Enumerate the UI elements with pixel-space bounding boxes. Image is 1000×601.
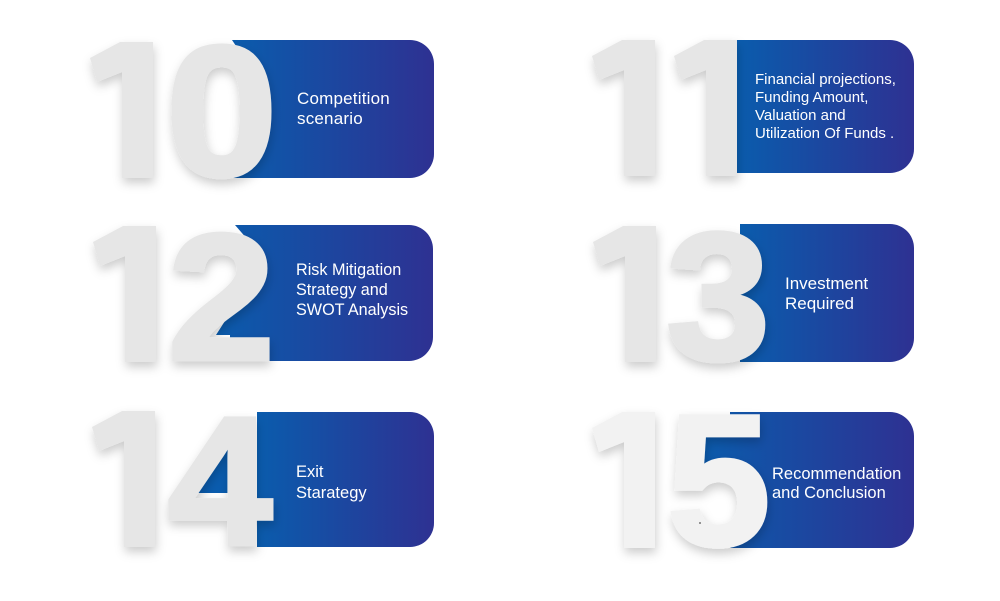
panel: item 15: [590, 412, 914, 558]
panel: item 13: [591, 224, 914, 373]
label 14: Starategy: [296, 484, 367, 502]
panel: item 12: [91, 225, 433, 372]
label 12: SWOT Analysis: [296, 301, 408, 319]
label 13: Investment: [785, 274, 868, 293]
card 15: [698, 412, 914, 548]
card 12: [216, 225, 433, 361]
number 13: 1: [580, 184, 690, 404]
label 14: Exit: [296, 463, 324, 481]
card 14: [257, 412, 434, 547]
number 13: [591, 226, 770, 373]
panel: item 10: [88, 40, 434, 189]
number 15: [590, 412, 771, 558]
number 14: [90, 411, 278, 556]
number 15: 1: [579, 370, 689, 590]
label 13: Required: [785, 294, 854, 313]
number 14: 4: [167, 379, 273, 584]
panel: item 11: [590, 40, 914, 186]
panel: item 14: [90, 411, 434, 556]
number 11: [590, 40, 742, 186]
card 11: [737, 40, 914, 173]
label 10: scenario: [297, 109, 363, 128]
label 15: Recommendation: [772, 465, 901, 483]
label 11: Utilization Of Funds .: [755, 125, 894, 142]
number 13: 3: [666, 196, 770, 399]
card 13: [740, 224, 914, 362]
number 10: [88, 42, 276, 189]
label 12: Risk Mitigation: [296, 261, 401, 279]
label 11: Valuation and: [755, 107, 846, 124]
label 12: Strategy and: [296, 281, 388, 299]
number 10: 1: [77, 0, 187, 220]
number 12: 1: [80, 184, 190, 404]
label 11: Financial projections,: [755, 71, 896, 88]
number 11: 1: [661, 0, 771, 218]
counter of the 4 showing the card colour: [192, 430, 230, 493]
speck on the 5: [699, 522, 701, 524]
number 11: 1: [579, 0, 689, 218]
label 10: Competition: [297, 89, 390, 108]
label 11: Funding Amount,: [755, 89, 868, 106]
number 10: 0: [166, 8, 278, 216]
number 14: 1: [79, 369, 189, 589]
card 10: [232, 40, 434, 178]
number 15: 5: [667, 376, 771, 585]
number 12: [91, 226, 275, 372]
number 12: 2: [168, 196, 275, 398]
label 15: and Conclusion: [772, 484, 886, 502]
